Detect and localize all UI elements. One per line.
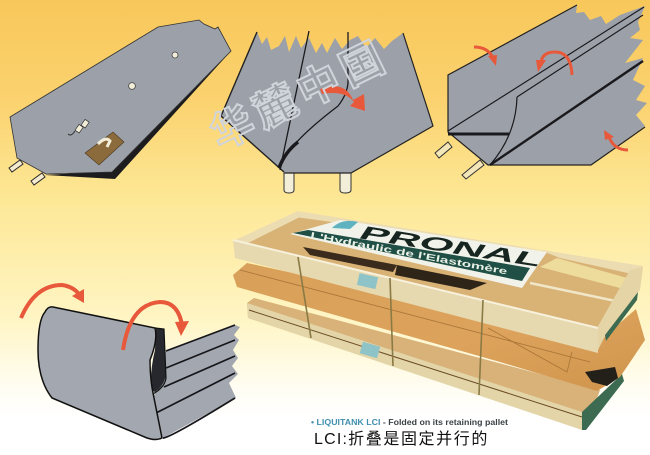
pleats (150, 325, 240, 438)
upper frame: back rail and interior (233, 213, 643, 330)
arrow: front fold (123, 302, 182, 350)
tank diagram 2: first fold (221, 31, 433, 193)
fold lines (279, 31, 348, 170)
sign logo text: PRONAL (354, 223, 548, 271)
arrow: back fold (21, 285, 80, 318)
small outlet marks (68, 119, 89, 135)
dark underside edge (45, 51, 231, 179)
kraft paper wrap (233, 263, 645, 391)
tank diagram 4: rolled fold (21, 285, 240, 440)
brown patch (85, 132, 124, 165)
roll body (38, 307, 162, 440)
watermark: 华麓中国 (199, 25, 393, 162)
photo caption: English: • LIQUITANK LCI - Folded on its retaining pallet (311, 417, 508, 427)
inlet pipes (9, 160, 45, 185)
crate photo: folded tank on retaining pallet (233, 211, 645, 430)
tank surface (10, 20, 231, 174)
pleat lines (156, 325, 235, 438)
tank diagram 3: folded lengthwise (435, 5, 647, 179)
dark paper opening (585, 367, 618, 386)
arrow: fold direction (320, 86, 365, 111)
outline edges (448, 5, 645, 165)
pipes (435, 142, 484, 179)
blue labels (357, 273, 378, 289)
fabric (448, 5, 647, 165)
pegs (284, 172, 351, 193)
tank diagram 1: unfolded tank (9, 20, 231, 185)
front rail (233, 240, 598, 353)
outline edges (221, 32, 433, 173)
PRONAL sign (290, 220, 548, 288)
arrows (474, 47, 628, 150)
right end rail (597, 267, 643, 352)
caption: Chinese: LCI:折叠是固定并行的 (314, 430, 489, 448)
fold lines (448, 7, 644, 165)
dark gaps under sign (303, 247, 397, 272)
dark inner fold (151, 328, 166, 392)
lower pallet (247, 298, 624, 430)
straps (298, 257, 483, 395)
left end rail (233, 211, 306, 244)
sign tagline text: L'Hydraulic de l'Elastomère (310, 230, 508, 276)
fabric (221, 32, 433, 173)
round fittings (129, 83, 135, 89)
